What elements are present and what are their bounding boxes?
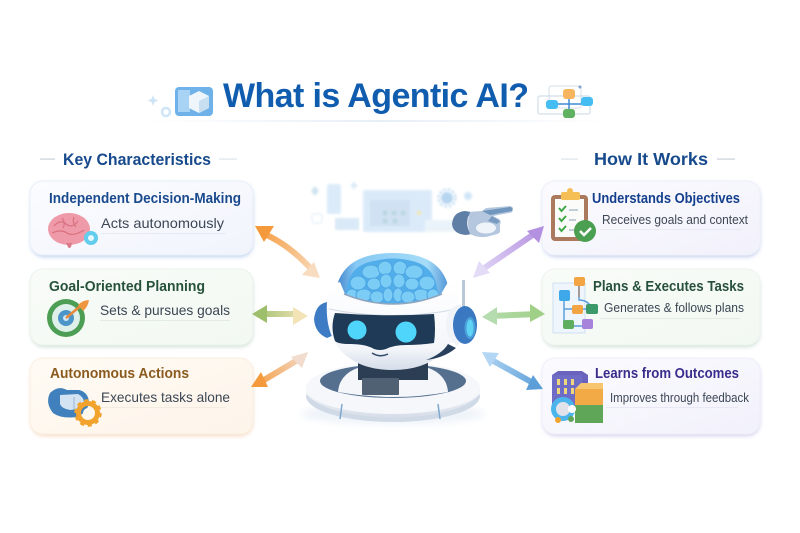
- robot dome: [335, 253, 450, 302]
- icon: brain: [48, 213, 98, 248]
- heading: Key Characteristics: Key Characteristics: [63, 150, 211, 169]
- panel: Learns from Outcomes: [542, 358, 760, 436]
- robot visor: [332, 313, 435, 350]
- arrow: outcomes to robot: [482, 352, 543, 390]
- panel: Plans & Executes Tasks: Generates & follows plans: [604, 300, 744, 315]
- heading: How It Works: How It Works: [594, 149, 708, 169]
- robot eyes: [348, 320, 366, 340]
- panel: Goal-Oriented Planning: Sets & pursues goals: [100, 302, 230, 318]
- panel: Autonomous Actions: Executes tasks alone: [101, 389, 230, 405]
- panel: Plans & Executes Tasks: Plans & Executes Tasks: [593, 279, 744, 295]
- arrow: objectives to robot: [473, 226, 544, 278]
- icon: gear and machine: [48, 388, 100, 425]
- arrow: actions to robot: [251, 352, 308, 387]
- panel: Learns from Outcomes: Improves through feedback: [610, 390, 749, 405]
- panel: Autonomous Actions: [30, 358, 253, 436]
- panel: Independent Decision-Making: Independent Decision-Making: [49, 191, 241, 207]
- panel: Autonomous Actions: Autonomous Actions: [50, 366, 189, 382]
- title: What is Agentic AI?: [223, 77, 529, 115]
- illustration: faded dashboard and robot hand: [304, 181, 513, 237]
- robot base: [301, 362, 485, 424]
- panel: Understands Objectives: [542, 181, 760, 257]
- robot smile: [372, 353, 388, 356]
- panel: Goal-Oriented Planning: Goal-Oriented Planning: [49, 279, 205, 295]
- robot right headphone: [426, 280, 477, 360]
- hand palm and fingers: [468, 206, 513, 237]
- panel: Understands Objectives: Receives goals and context: [602, 212, 748, 227]
- icon: flow diagram: [553, 277, 598, 333]
- icon: title cube panel: [148, 87, 213, 116]
- panel: Independent Decision-Making: Acts autonomously: [101, 215, 224, 231]
- icon: building and blocks: [551, 371, 603, 423]
- panel: Understands Objectives: Understands Objectives: [592, 191, 740, 207]
- arrow: decision-making to robot: [255, 226, 320, 278]
- illustration: robot: [301, 253, 485, 424]
- robot brain folds: [346, 261, 439, 303]
- arrow: planning to robot: [252, 305, 308, 325]
- icon: title flowchart: [538, 86, 593, 118]
- icon: clipboard: [551, 188, 596, 242]
- panel: Plans & Executes Tasks: [542, 269, 760, 347]
- icon: target: [47, 299, 89, 337]
- panel: Independent Decision-Making: [30, 181, 253, 257]
- arrow: plans to robot: [482, 304, 545, 325]
- panel: Goal-Oriented Planning: [30, 269, 253, 347]
- hand cuff: [452, 211, 472, 235]
- panel: Learns from Outcomes: Learns from Outcomes: [595, 366, 739, 382]
- robot head: [327, 282, 459, 370]
- robot left ear: [314, 302, 334, 338]
